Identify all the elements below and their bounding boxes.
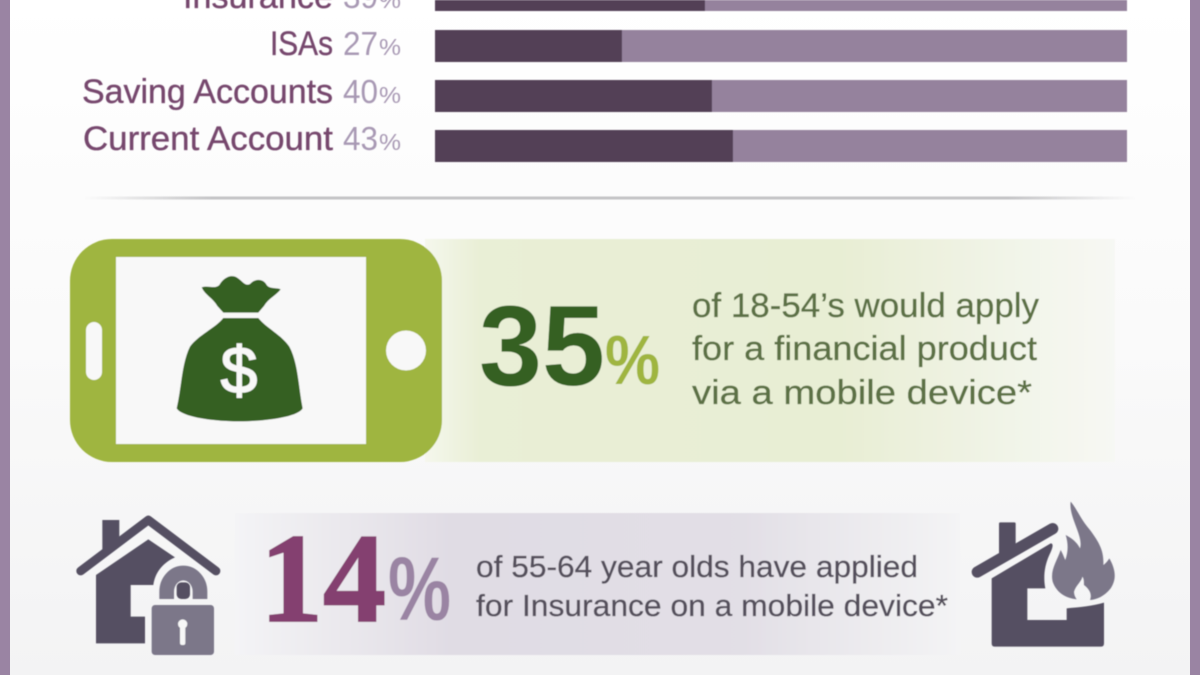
row: ISAs 27%: ISAs: [270, 25, 333, 63]
icon: money bag: [177, 276, 303, 421]
row: ISAs 27%: %: [379, 34, 401, 60]
text: 18-54s mobile application: [692, 287, 1039, 412]
text: 55-64 insurance application: for Insurance on a mobile device*: [476, 588, 948, 623]
icon: house with padlock: [81, 520, 216, 655]
row: Saving Accounts 40%: %: [379, 82, 401, 108]
row: Current Account 43%: Current Account: [83, 120, 334, 158]
text: 55-64 insurance application: [476, 549, 948, 623]
row: ISAs 27%: [270, 25, 1127, 63]
statistic: 14%: 14: [260, 509, 386, 649]
text: 55-64 insurance application: of 55-64 year olds have applied: [476, 549, 918, 584]
row: Current Account 43%: %: [379, 129, 401, 155]
statistic: 14%: [260, 509, 451, 649]
row: Saving Accounts 40%: Saving Accounts: [82, 73, 333, 111]
bar chart: product application rates: [82, 0, 1127, 162]
row: Insurance 39%: [183, 0, 1127, 16]
statistic: 35%: 35: [479, 283, 605, 410]
panel: 14% insurance stat: [81, 502, 1115, 655]
row: ISAs 27%: 27: [343, 25, 378, 62]
text: 18-54s mobile application: via a mobile device*: [692, 374, 1032, 412]
text: 18-54s mobile application: of 18-54’s would apply: [692, 287, 1039, 325]
panel: 35% mobile application stat: [70, 239, 1115, 462]
icon: money bag: $: [221, 333, 257, 407]
icon: house on fire: [977, 502, 1115, 647]
row: Current Account 43%: 43: [343, 120, 378, 157]
statistic: 14%: %: [388, 540, 451, 640]
row: Saving Accounts 40%: 40: [343, 73, 378, 110]
row: Current Account 43%: [83, 120, 1127, 162]
icon: phone with money bag: [70, 239, 442, 462]
row: Saving Accounts 40%: [82, 73, 1127, 112]
text: 18-54s mobile application: for a financial product: [692, 330, 1038, 368]
statistic: 35%: %: [605, 321, 660, 399]
